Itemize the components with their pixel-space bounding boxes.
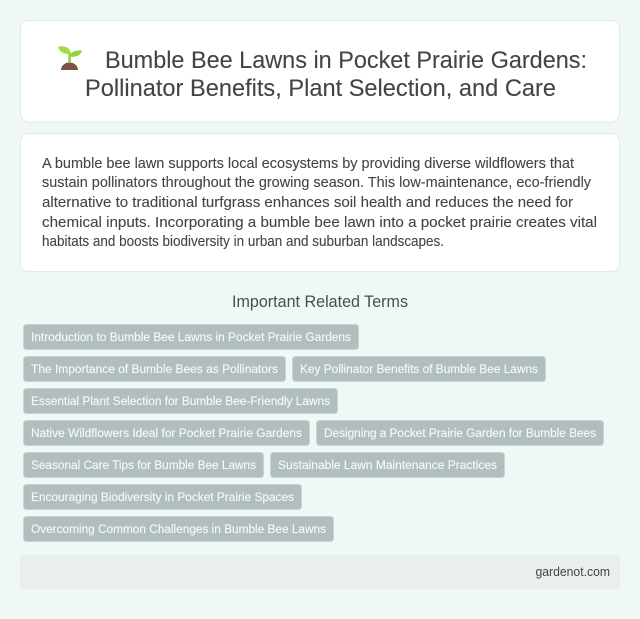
- footer: [20, 555, 620, 589]
- panel: description: chemical inputs. Incorporating a bumble bee lawn into a pocket prairie creates vital: [42, 215, 597, 231]
- panel: title card: [20, 20, 620, 122]
- panel: description: A bumble bee lawn supports local ecosystems by providing diverse wildflowers that: [42, 156, 574, 172]
- tag: importance: [24, 356, 286, 382]
- panel: description: sustain pollinators throughout the growing season. This low-maintenance, eco-friendly: [42, 175, 592, 191]
- tag: designing: Designing a Pocket Prairie Garden for Bumble Bees: [324, 426, 596, 440]
- panel: description: habitats and boosts biodiversity in urban and suburban landscapes.: [42, 234, 444, 250]
- tag: biodiversity: [24, 484, 302, 510]
- tag: sustainable maintenance: [270, 452, 504, 478]
- tag: designing: [316, 420, 604, 446]
- tag: introduction: [24, 324, 358, 350]
- tag: challenges: [24, 516, 334, 542]
- tag: native wildflowers: [24, 420, 310, 446]
- title: Bumble Bee Lawns in Pocket Prairie Gardens:: [105, 47, 587, 74]
- title: [85, 47, 587, 102]
- footer: gardenot.com: [536, 564, 610, 579]
- tag: plant selection: [24, 388, 338, 414]
- tag: native wildflowers: Native Wildflowers Ideal for Pocket Prairie Gardens: [31, 426, 302, 440]
- tag: biodiversity: Encouraging Biodiversity in Pocket Prairie Spaces: [31, 490, 294, 504]
- tag: seasonal care: Seasonal Care Tips for Bumble Bee Lawns: [31, 458, 256, 472]
- panel: description: [20, 134, 620, 272]
- tag: introduction: Introduction to Bumble Bee Lawns in Pocket Prairie Gardens: [31, 330, 351, 344]
- tag: importance: The Importance of Bumble Bees as Pollinators: [31, 362, 278, 376]
- tag: challenges: Overcoming Common Challenges in Bumble Bee Lawns: [31, 522, 326, 536]
- icon: sprout: [58, 46, 82, 70]
- tag: seasonal care: [24, 452, 264, 478]
- panel: description: alternative to traditional turfgrass enhances soil health and reduces the need for: [42, 195, 573, 211]
- tag: key benefits: Key Pollinator Benefits of Bumble Bee Lawns: [300, 362, 538, 376]
- tag list: [24, 324, 604, 542]
- title: Pollinator Benefits, Plant Selection, and Care: [85, 75, 556, 102]
- tag: key benefits: [292, 356, 546, 382]
- tag: plant selection: Essential Plant Selection for Bumble Bee-Friendly Lawns: [31, 394, 330, 408]
- tag: sustainable maintenance: Sustainable Lawn Maintenance Practices: [278, 458, 497, 472]
- heading: related terms: Important Related Terms: [232, 293, 408, 311]
